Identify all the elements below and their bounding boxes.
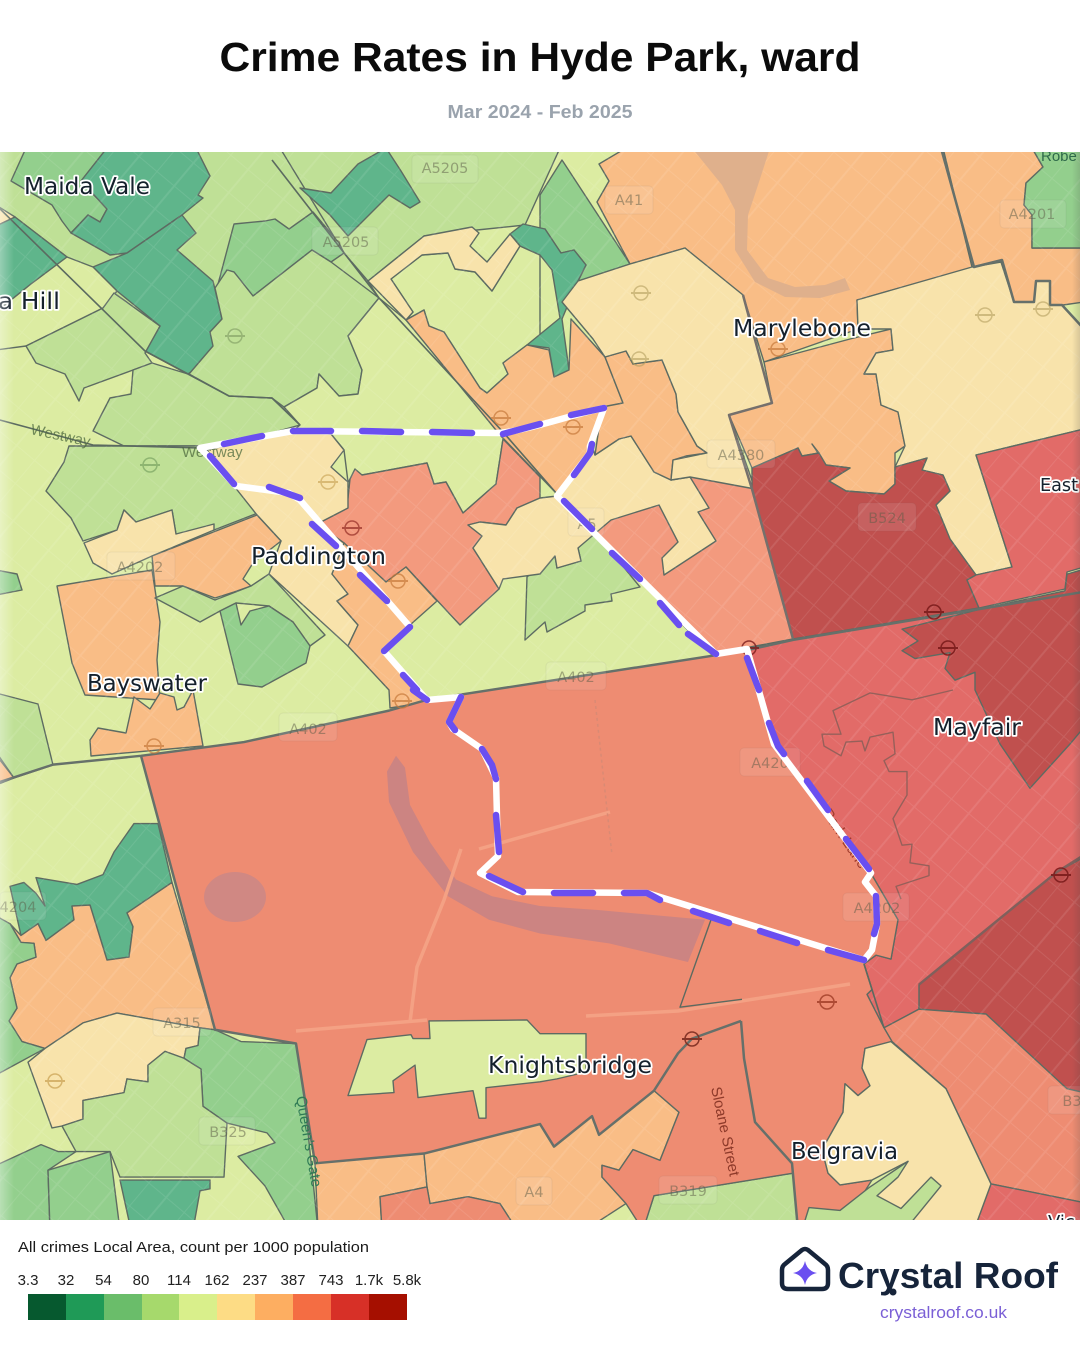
road number shields: A5 xyxy=(577,517,597,533)
tube station markers xyxy=(45,286,1071,1088)
legend tick labels xyxy=(18,1272,422,1289)
legend tick labels: 32 xyxy=(58,1272,74,1289)
title: Crime Rates in Hyde Park, ward xyxy=(220,34,860,80)
road names: Sloane Street xyxy=(707,1085,743,1179)
legend tick labels: 237 xyxy=(242,1272,268,1289)
place labels: Knightsbridge xyxy=(488,1053,652,1079)
place labels: Paddington xyxy=(251,544,386,570)
place labels: Bayswater xyxy=(87,671,208,697)
place labels: Mayfair xyxy=(933,715,1022,741)
road number shields: A315 xyxy=(163,1016,201,1032)
road number shields: B524 xyxy=(868,511,906,527)
road names: Westway xyxy=(182,444,243,461)
place labels: Maida Vale xyxy=(24,174,150,200)
map edge shading xyxy=(0,152,1080,1220)
legend tick labels: 80 xyxy=(133,1272,149,1289)
road number shields: A4201 xyxy=(1009,207,1055,223)
place labels: Belgravia xyxy=(791,1139,898,1165)
place labels xyxy=(0,174,1078,1233)
street grid texture xyxy=(0,152,1080,1220)
legend tick labels: 162 xyxy=(204,1272,230,1289)
water: Round Pond xyxy=(204,872,266,922)
legend tick labels: 5.8k xyxy=(393,1272,422,1289)
place labels: Marylebone xyxy=(733,316,871,342)
legend tick labels: 54 xyxy=(95,1272,112,1289)
legend colour scale xyxy=(28,1294,407,1320)
website url: crystalroof.co.uk xyxy=(880,1304,1008,1322)
place labels: Vic xyxy=(1048,1212,1075,1233)
road number shields: A4380 xyxy=(718,448,764,464)
logo: Crystal Roof xyxy=(782,1249,1059,1296)
place labels: East xyxy=(1040,475,1078,496)
legend tick labels: 743 xyxy=(318,1272,344,1289)
road number shields: A402 xyxy=(289,722,327,738)
road names: Robe xyxy=(1041,148,1077,165)
road number shields: A420 xyxy=(751,756,789,772)
ward boundary: Hyde Park dashed outline xyxy=(200,408,877,960)
road names: Queen's Gate xyxy=(292,1095,325,1188)
road number shields: A4 xyxy=(524,1185,544,1201)
road number shields: B319 xyxy=(669,1184,707,1200)
road number shields: B325 xyxy=(209,1125,247,1141)
Hyde Park and Knightsbridge area xyxy=(141,651,991,1230)
road number shields: A5205 xyxy=(422,161,468,177)
legend title: All crimes Local Area, count per 1000 population xyxy=(18,1239,369,1256)
legend tick labels: 387 xyxy=(280,1272,306,1289)
road number shields: A5205 xyxy=(323,235,369,251)
icon: house with star xyxy=(782,1249,828,1289)
road number shields: 4204 xyxy=(0,900,36,916)
road names: Westway xyxy=(29,421,92,451)
logo: Crystal Roof: Crystal Roof xyxy=(838,1255,1059,1296)
road number shields xyxy=(0,155,1080,1205)
road number shields: A402 xyxy=(557,670,595,686)
legend tick labels: 1.7k xyxy=(355,1272,384,1289)
water: Serpentine lake xyxy=(387,756,705,962)
water: Regent's Park lake xyxy=(692,148,850,298)
legend tick labels: 114 xyxy=(167,1272,191,1289)
road number shields: A4202 xyxy=(117,560,163,576)
park paths xyxy=(296,812,850,1031)
road names: Park Lane xyxy=(819,806,871,872)
road number shields: A41 xyxy=(615,193,643,209)
road names xyxy=(29,148,1077,1188)
subtitle: date range: Mar 2024 - Feb 2025 xyxy=(448,102,632,122)
legend tick labels: 3.3 xyxy=(18,1272,38,1289)
road number shields: A4202 xyxy=(854,901,900,917)
